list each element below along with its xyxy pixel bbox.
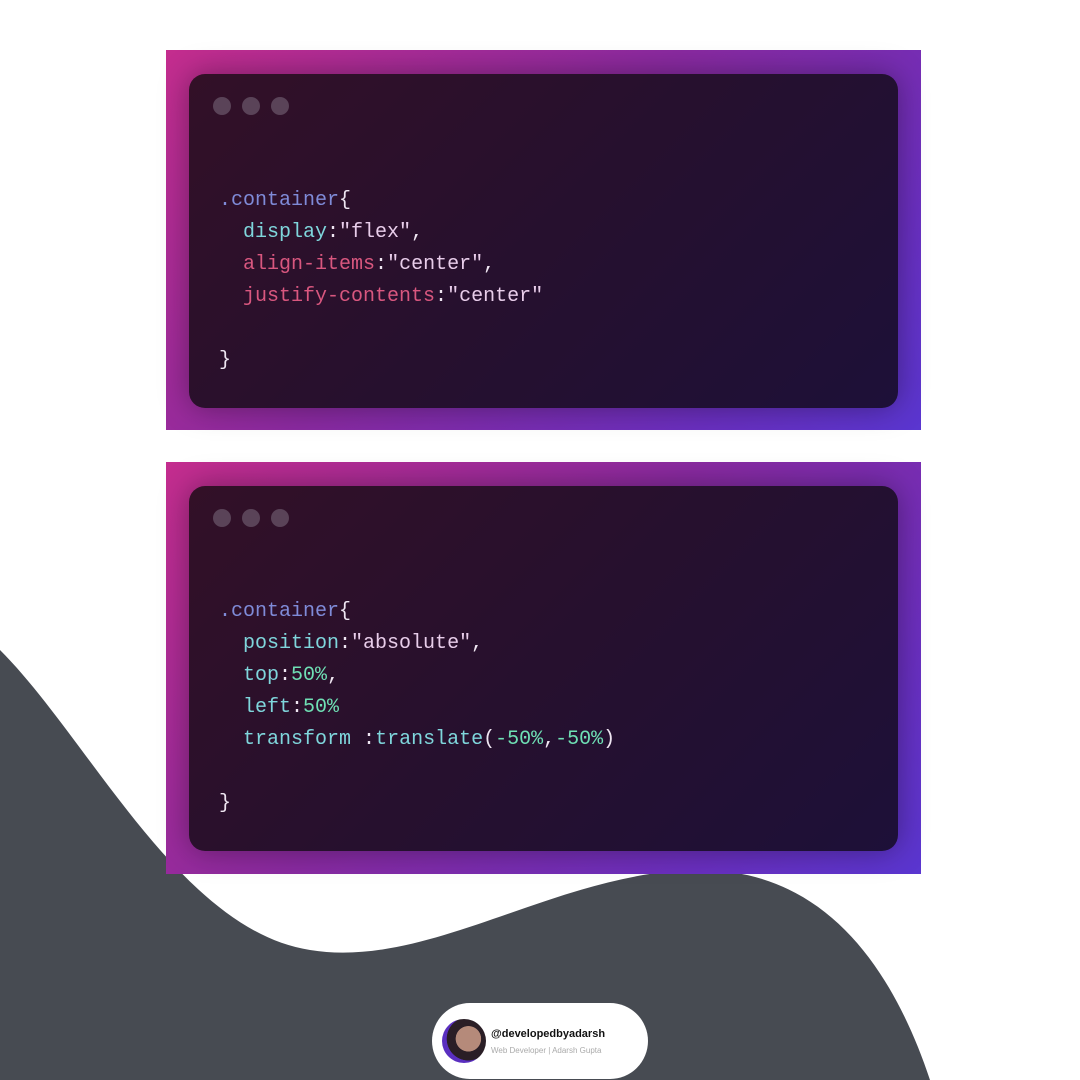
- panel: absolute centering code card: [166, 462, 921, 874]
- author badge: [432, 1003, 648, 1079]
- code block: absolute: .container{ position:"absolute", top:50%, left:50% transform :translate(-50%,-50%) }: [219, 600, 615, 815]
- subtitle text: Web Developer | Adarsh Gupta: [491, 1046, 601, 1055]
- code block: flex: .container{ display:"flex", align-items:"center", justify-contents:"center" }: [219, 189, 543, 372]
- handle text: @developedbyadarsh: [491, 1028, 605, 1040]
- window dots: [213, 509, 289, 527]
- window dots: [213, 97, 289, 115]
- panel: flex centering code card: [166, 50, 921, 430]
- avatar: [442, 1019, 486, 1063]
